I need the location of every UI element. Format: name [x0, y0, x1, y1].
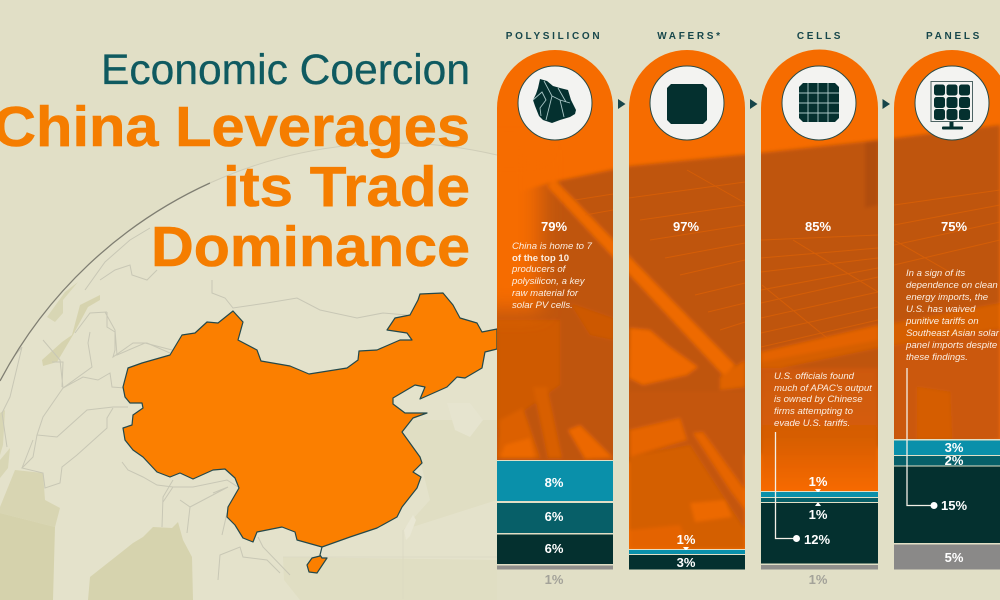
- callout: cells 12%: [776, 432, 830, 547]
- china share percentages: 85%: [805, 219, 831, 234]
- icon: wafer: [650, 66, 724, 140]
- bars: polysilicon: [497, 461, 613, 587]
- note: cells: [774, 371, 872, 429]
- note: polysilicon: raw material for: [512, 288, 579, 299]
- note: panels: U.S. has waived: [906, 304, 976, 315]
- note: polysilicon: polysilicon, a key: [511, 276, 586, 287]
- bars: wafers: 3%: [677, 555, 696, 570]
- callout: cells 12%: 12%: [804, 532, 830, 547]
- bars: cells: 1%: [809, 507, 828, 522]
- solar panel photo columns: [478, 40, 1000, 570]
- arrow: cells to panels: [882, 99, 890, 109]
- title: China Leverages: [0, 95, 470, 159]
- bars: cells: 1%: [809, 572, 828, 587]
- column headings: POLYSILICON: [506, 31, 602, 42]
- bars: polysilicon: 8%: [545, 475, 564, 490]
- china share percentages: 97%: [673, 219, 699, 234]
- china share percentages: [541, 219, 967, 234]
- globe map: [0, 143, 497, 600]
- bars: polysilicon: 6%: [545, 541, 564, 556]
- bars: wafers: [629, 532, 745, 570]
- bars: panels: 2%: [945, 453, 964, 468]
- icon: polysilicon rock: [518, 66, 592, 140]
- callout: panels 15%: 15%: [941, 498, 967, 513]
- bars: cells: 1%: [809, 474, 828, 489]
- note: panels: dependence on clean: [906, 280, 998, 291]
- note: cells: much of APAC's output: [774, 383, 872, 394]
- note: panels: [905, 268, 1000, 363]
- note: polysilicon: of the top 10: [512, 253, 569, 264]
- bars: panels: 5%: [945, 550, 964, 565]
- note: panels: these findings.: [906, 352, 968, 363]
- column headings: CELLS: [797, 31, 843, 42]
- note: polysilicon: China is home to 7: [512, 241, 593, 252]
- column headings: [506, 31, 982, 42]
- note: cells: firms attempting to: [774, 406, 854, 417]
- note: cells: evade U.S. tariffs.: [774, 418, 850, 429]
- title: Dominance: [151, 215, 470, 279]
- bars: panels: [894, 440, 1000, 570]
- column headings: PANELS: [926, 31, 982, 42]
- note: panels: In a sign of its: [906, 268, 965, 279]
- note: polysilicon: [511, 241, 593, 311]
- china map: [123, 293, 497, 573]
- note: panels: energy imports, the: [906, 292, 988, 303]
- arrow: polysilicon to wafers: [618, 99, 626, 109]
- note: polysilicon: producers of: [511, 264, 567, 275]
- bars: polysilicon: 6%: [545, 509, 564, 524]
- china share percentages: 75%: [941, 219, 967, 234]
- china share percentages: 79%: [541, 219, 567, 234]
- title: Economic Coercion: [101, 46, 470, 94]
- note: cells: is owned by Chinese: [774, 394, 863, 405]
- icon: solar cell: [782, 66, 856, 140]
- bars: wafers: 1%: [677, 532, 696, 547]
- arrow: wafers to cells: [750, 99, 758, 109]
- note: panels: Southeast Asian solar: [906, 328, 1000, 339]
- icon: solar panel: [915, 66, 989, 140]
- callout: panels 15%: [907, 368, 967, 513]
- bars: panels: 3%: [945, 440, 964, 455]
- bars: polysilicon: 1%: [545, 572, 564, 587]
- column headings: WAFERS*: [657, 31, 723, 42]
- title: [0, 46, 470, 279]
- note: polysilicon: solar PV cells.: [512, 300, 573, 311]
- note: panels: punitive tariffs on: [905, 316, 979, 327]
- bars: cells: [761, 474, 878, 587]
- title: its Trade: [223, 155, 470, 219]
- note: panels: panel imports despite: [905, 340, 997, 351]
- note: cells: U.S. officials found: [774, 371, 855, 382]
